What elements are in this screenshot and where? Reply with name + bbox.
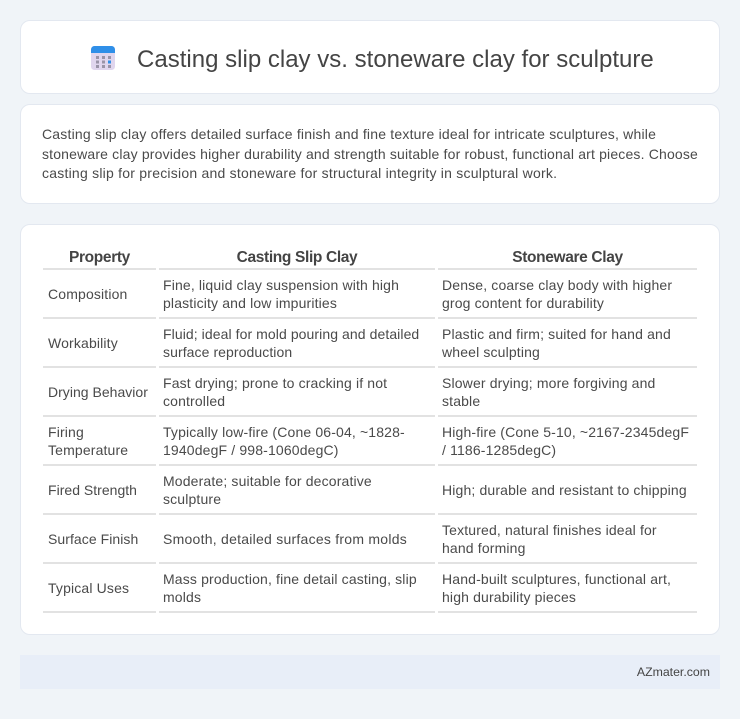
footer credit: AZmater.com	[637, 665, 710, 679]
header: Stoneware Clay: Stoneware Clay	[512, 249, 623, 266]
summary card	[20, 104, 720, 204]
row: Firing Temperature: Temperature	[48, 442, 128, 458]
comparison table: molds	[163, 589, 201, 605]
comparison table: high durability pieces	[442, 589, 576, 605]
comparison table: stable	[442, 393, 480, 409]
row: Typical Uses: Typical Uses	[48, 580, 129, 596]
row: Workability: Workability	[48, 335, 118, 351]
comparison table: / 1186-1285degC)	[442, 442, 556, 458]
comparison table: plasticity and low impurities	[163, 295, 337, 311]
comparison table: Smooth, detailed surfaces from molds	[163, 531, 407, 547]
comparison table: Textured, natural finishes ideal for	[442, 522, 657, 538]
comparison table: Fast drying; prone to cracking if not	[163, 375, 387, 391]
comparison table: Slower drying; more forgiving and	[442, 375, 656, 391]
row: Drying Behavior: Drying Behavior	[48, 384, 148, 400]
comparison table: surface reproduction	[163, 344, 292, 360]
comparison table: High; durable and resistant to chipping	[442, 482, 687, 498]
comparison table: controlled	[163, 393, 225, 409]
title card	[20, 20, 720, 94]
comparison table: wheel sculpting	[442, 344, 540, 360]
comparison table: Mass production, fine detail casting, slip	[163, 571, 417, 587]
footer bar	[20, 655, 720, 689]
row: Firing Temperature	[48, 424, 128, 458]
row: Composition: Composition	[48, 286, 127, 302]
icon: calendar	[91, 46, 115, 70]
row: Surface Finish: Surface Finish	[48, 531, 138, 547]
header: Casting Slip Clay: Casting Slip Clay	[237, 249, 357, 266]
comparison table: Plastic and firm; suited for hand and	[442, 326, 671, 342]
comparison table: sculpture	[163, 491, 221, 507]
comparison table: Typically low-fire (Cone 06-04, ~1828-	[163, 424, 405, 440]
comparison table: hand forming	[442, 540, 526, 556]
row: Fired Strength: Fired Strength	[48, 482, 137, 498]
comparison table: grog content for durability	[442, 295, 604, 311]
summary text	[42, 126, 698, 181]
summary text: casting slip for precision and stoneware for structural integrity in sculptural work.	[42, 165, 557, 181]
comparison table: Fluid; ideal for mold pouring and detailed	[163, 326, 419, 342]
header: Property: Property	[69, 249, 130, 266]
comparison table: Fine, liquid clay suspension with high	[163, 277, 399, 293]
title: Casting slip clay vs. stoneware clay for sculpture	[137, 46, 654, 73]
comparison table: High-fire (Cone 5-10, ~2167-2345degF	[442, 424, 689, 440]
comparison table: 1940degF / 998-1060degC)	[163, 442, 339, 458]
comparison table: Dense, coarse clay body with higher	[442, 277, 672, 293]
comparison table: Moderate; suitable for decorative	[163, 473, 372, 489]
row: Firing Temperature: Firing	[48, 424, 84, 440]
summary text: Casting slip clay offers detailed surface finish and fine texture ideal for intricate sculptures, while	[42, 126, 656, 142]
summary text: stoneware clay provides higher durability and strength suitable for robust, functional art pieces. Choose	[42, 146, 698, 162]
table card	[20, 224, 720, 635]
comparison table: Hand-built sculptures, functional art,	[442, 571, 671, 587]
